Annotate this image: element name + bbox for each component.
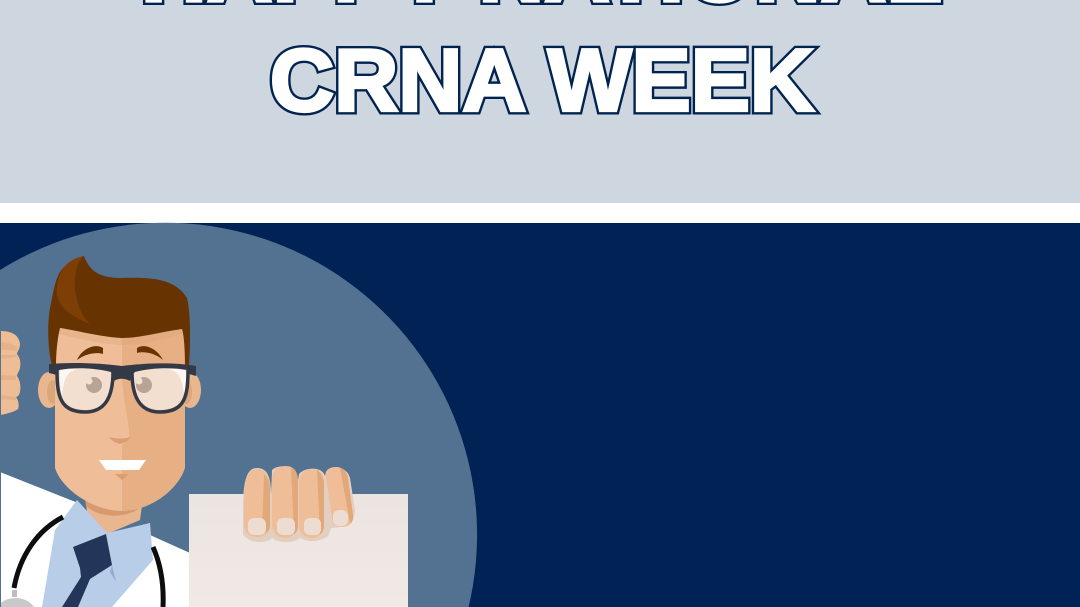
icon: fingers holding paper — [243, 466, 355, 542]
nose — [109, 437, 131, 444]
mouth — [99, 460, 146, 470]
stethoscope — [0, 517, 163, 607]
paper sheet — [189, 494, 408, 607]
title: CRNA WEEK — [270, 30, 814, 130]
hair — [48, 256, 190, 366]
title — [141, 0, 942, 130]
left edge strip — [0, 270, 1, 607]
neck — [85, 498, 143, 534]
ears — [38, 372, 201, 408]
shirt — [42, 500, 153, 607]
tie — [62, 534, 112, 607]
glasses — [49, 363, 196, 412]
navy panel — [0, 223, 1080, 607]
coat — [0, 472, 190, 607]
header panel — [0, 0, 1080, 203]
icon: fist at left edge — [0, 331, 20, 415]
face — [55, 325, 186, 515]
title: CRNA WEEK — [270, 30, 814, 130]
illustration: doctor — [0, 256, 408, 607]
eyebrows — [77, 346, 163, 360]
circle backdrop — [0, 223, 477, 607]
